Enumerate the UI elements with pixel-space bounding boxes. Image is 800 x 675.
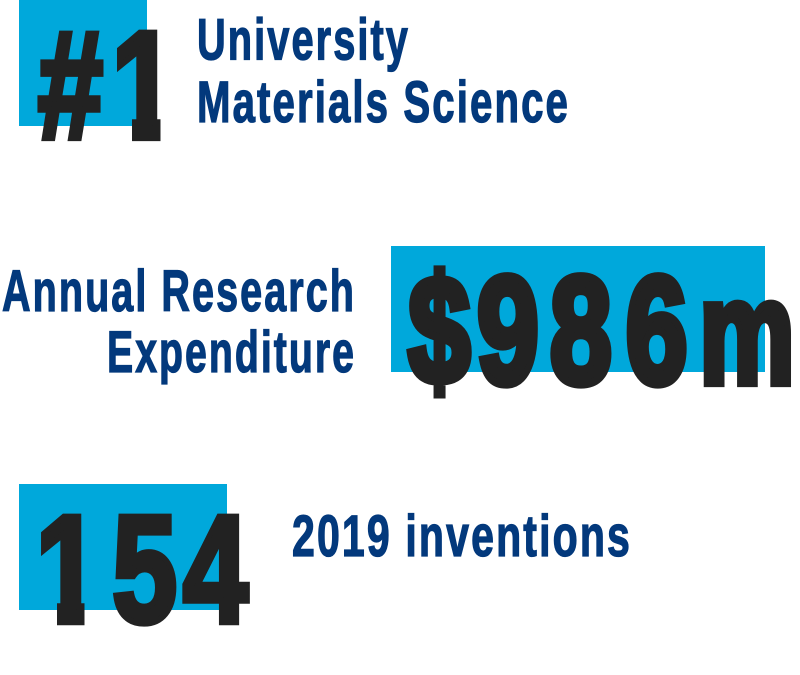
highlight block: $986m — [391, 246, 765, 372]
big number: #1: #1 — [38, 0, 177, 171]
stat: number one university — [19, 0, 567, 142]
big number: $986m: m — [699, 252, 795, 415]
heading: Annual Research Expenditure — [2, 259, 356, 385]
big number: 154: 154 — [35, 484, 248, 655]
heading: Annual Research Expenditure: Annual Research — [2, 259, 356, 324]
heading: Annual Research Expenditure: Expenditure — [107, 320, 356, 385]
heading: University Materials Science — [197, 8, 570, 135]
highlight block: #1 — [19, 0, 147, 126]
stat: 2019 inventions — [19, 484, 629, 627]
stat: annual research expenditure — [2, 246, 795, 416]
heading: University Materials Science: University — [197, 8, 410, 72]
heading: University Materials Science: Materials Science — [197, 70, 570, 135]
heading: 2019 inventions: 2019 inventions — [292, 504, 632, 569]
big number: $986m: $986 — [408, 246, 688, 416]
highlight block: 154 — [19, 484, 227, 610]
